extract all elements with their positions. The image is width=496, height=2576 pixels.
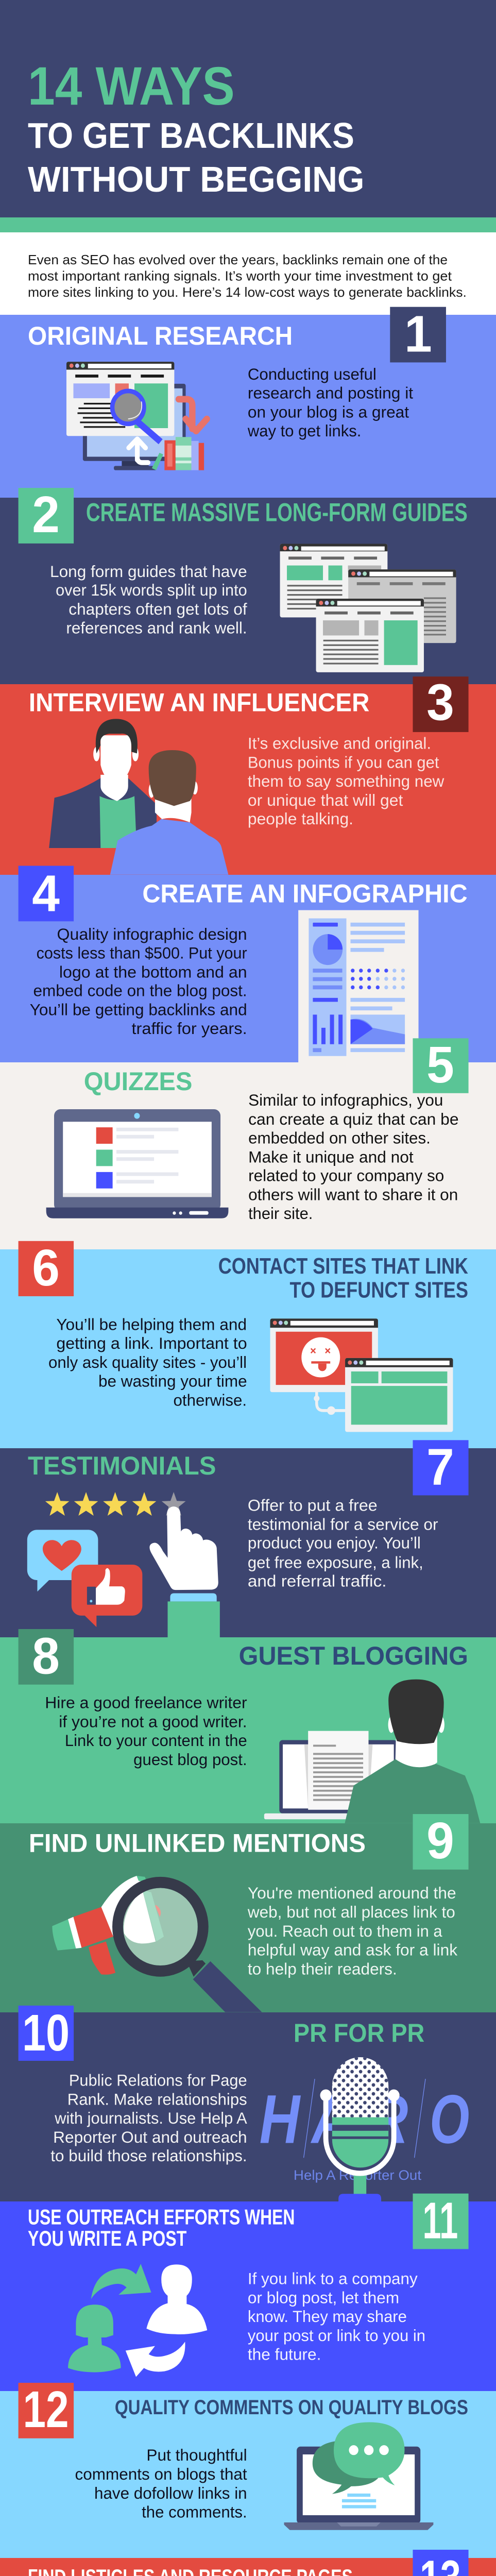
panel: 9 find unlinked mentions — [0, 1811, 496, 2012]
body text: Conducting useful — [248, 366, 377, 383]
heading — [28, 2205, 295, 2250]
number badge 12: 12 — [23, 2380, 69, 2438]
icon: dead site and replacement site — [270, 1318, 453, 1432]
heading: GUEST BLOGGING — [239, 1641, 468, 1670]
logo: HARO wordmark: R — [370, 2080, 408, 2158]
body text: product you enjoy. You’ll — [248, 1534, 421, 1552]
body text: Put thoughtful — [146, 2447, 247, 2464]
panel: title header — [0, 0, 496, 232]
body text: only ask quality sites - you’ll — [48, 1353, 247, 1371]
body text: You're mentioned around the — [248, 1884, 456, 1902]
title: WITHOUT BEGGING — [28, 160, 365, 199]
panel: 1 original research — [0, 305, 496, 498]
number badge 10: 10 — [22, 2004, 70, 2062]
body text: Link to your content in the — [65, 1732, 247, 1750]
body text: Public Relations for Page — [69, 2072, 247, 2090]
number badge 8: 8 — [32, 1627, 60, 1685]
body text — [75, 2447, 247, 2521]
number badge 11: 11 — [423, 2192, 458, 2249]
body text: testimonial for a service or — [248, 1516, 438, 1534]
icon: microphone — [320, 2057, 400, 2201]
body text: can create a quiz that can be — [248, 1111, 459, 1128]
intro text: most important ranking signals. It’s worth your time investment to get — [28, 269, 452, 284]
body text: way to get links. — [247, 422, 361, 440]
body text: them to say something new — [248, 772, 444, 790]
body text: to build those relationships. — [50, 2147, 247, 2165]
icon: two people exchanging arrows — [68, 2264, 207, 2377]
icon: writer at laptop with document — [264, 1680, 480, 1823]
heading: TO DEFUNCT SITES — [290, 1278, 468, 1303]
icon: two people talking — [49, 719, 228, 875]
body text: be wasting your time — [98, 1372, 247, 1390]
body text: embedded on other sites. — [248, 1129, 431, 1147]
heading: TESTIMONIALS — [28, 1451, 216, 1480]
icon: heart speech bubble — [27, 1530, 98, 1591]
heading: USE OUTREACH EFFORTS WHEN — [28, 2205, 295, 2229]
body text — [30, 925, 247, 1038]
heading: FIND UNLINKED MENTIONS — [29, 1829, 366, 1858]
body text: or blog post, let them — [248, 2289, 399, 2307]
body text: the comments. — [142, 2503, 247, 2521]
body text: related to your company so — [248, 1167, 444, 1185]
body text: have dofollow links in — [94, 2485, 247, 2502]
body text: and referral traffic. — [248, 1572, 387, 1590]
icon: research browser, monitor, magnifier and books — [66, 362, 207, 470]
body text — [247, 366, 414, 440]
body text: their site. — [248, 1205, 313, 1223]
body text: otherwise. — [174, 1392, 247, 1409]
body text: helpful way and ask for a link — [248, 1941, 458, 1959]
body text: Reporter Out and outreach — [53, 2128, 247, 2146]
panel: 5 quizzes — [0, 1036, 496, 1249]
intro text: more sites linking to you. Here’s 14 low-cost ways to generate backlinks. — [28, 285, 467, 300]
number badge 9: 9 — [426, 1811, 454, 1870]
body text: You’ll be getting backlinks and — [30, 1001, 247, 1019]
body text: If you link to a company — [248, 2270, 418, 2288]
panel: introduction — [0, 232, 496, 315]
body text: if you’re not a good writer. — [59, 1713, 247, 1731]
icon: thumbs-up speech bubble — [72, 1565, 142, 1627]
body text: or unique that will get — [248, 791, 403, 809]
number badge 4 — [19, 865, 74, 922]
title: TO GET BACKLINKS — [28, 116, 354, 156]
logo: HARO wordmark — [260, 2079, 469, 2183]
number badge 5: 5 — [426, 1036, 454, 1093]
body text: to help their readers. — [248, 1960, 397, 1978]
body text: comments on blogs that — [75, 2466, 247, 2483]
panel: 4 create an infographic — [0, 865, 496, 1063]
heading: INTERVIEW AN INFLUENCER — [29, 688, 369, 717]
number badge 5 — [413, 1036, 469, 1093]
panel: 12 quality comments — [0, 2380, 496, 2558]
number badge 3 — [413, 673, 469, 732]
body text: know. They may share — [248, 2308, 407, 2326]
body text — [248, 735, 444, 828]
number badge 1 — [390, 305, 446, 363]
heading: YOU WRITE A POST — [28, 2226, 186, 2250]
body text: Bonus points if you can get — [248, 754, 439, 772]
body text: you. Reach out to them in a — [248, 1922, 443, 1940]
icon: infographic page — [298, 910, 419, 1063]
panel: 10 PR for PR — [0, 2004, 496, 2201]
number badge 2: 2 — [32, 486, 60, 544]
body text: Rank. Make relationships — [67, 2091, 247, 2109]
body text: on your blog is a great — [248, 403, 409, 421]
body text: guest blog post. — [133, 1751, 247, 1769]
logo: HARO wordmark: H — [260, 2080, 301, 2158]
heading: CREATE AN INFOGRAPHIC — [142, 879, 468, 908]
body text: the future. — [248, 2346, 321, 2363]
icon: megaphone under magnifying glass — [52, 1876, 262, 2012]
icon: star rating — [45, 1492, 186, 1516]
icon: quiz on laptop — [46, 1109, 228, 1218]
logo: HARO wordmark: Help A Reporter Out — [294, 2167, 422, 2183]
heading: QUIZZES — [84, 1067, 192, 1096]
panel: 2 long-form guides — [0, 486, 496, 684]
icon: comment bubbles on laptop — [284, 2422, 433, 2530]
body text: Hire a good freelance writer — [45, 1694, 247, 1712]
body text — [248, 1092, 459, 1223]
panel: 7 testimonials — [0, 1438, 496, 1637]
body text: people talking. — [248, 810, 353, 828]
body text: with journalists. Use Help A — [54, 2109, 247, 2127]
body text: You’ll be helping them and — [56, 1316, 247, 1334]
number badge 6 — [19, 1239, 74, 1296]
number badge 1: 1 — [404, 305, 432, 363]
body text: It’s exclusive and original. — [248, 735, 431, 753]
body text: Offer to put a free — [248, 1497, 378, 1515]
title — [28, 56, 365, 199]
body text: Long form guides that have — [50, 563, 247, 581]
number badge 7: 7 — [426, 1438, 454, 1496]
logo: HARO wordmark: A — [311, 2080, 350, 2158]
body text: over 15k words split up into — [56, 582, 247, 599]
body text: web, but not all places link to — [247, 1903, 455, 1921]
logo: HARO wordmark: O — [430, 2080, 469, 2158]
panel: 13 listicles and resource pages — [0, 2550, 496, 2576]
panel: 6 contact sites that link to defunct sites — [0, 1239, 496, 1448]
body text: embed code on the blog post. — [33, 982, 247, 1000]
intro text: Even as SEO has evolved over the years, backlinks remain one of the — [28, 252, 448, 267]
number badge 7 — [413, 1438, 469, 1496]
body text: get free exposure, a link, — [248, 1554, 423, 1572]
title: 14 WAYS — [28, 56, 235, 116]
icon: stacked browser windows — [280, 544, 456, 672]
body text: chapters often get lots of — [69, 601, 247, 618]
body text — [248, 1497, 438, 1590]
body text — [50, 563, 247, 637]
number badge 8 — [19, 1627, 74, 1685]
heading — [218, 1253, 468, 1303]
body text: costs less than $500. Put your — [37, 944, 247, 962]
body text: references and rank well. — [66, 619, 247, 637]
icon: pointing hand tapping star — [149, 1506, 220, 1637]
number badge 2 — [19, 486, 74, 544]
body text: Quality infographic design — [57, 925, 247, 943]
panel: 3 interview an influencer — [0, 673, 496, 875]
panel: 11 outreach efforts — [0, 2192, 496, 2391]
body text: getting a link. Important to — [56, 1334, 247, 1352]
body text — [50, 2072, 247, 2165]
number badge 9 — [413, 1811, 469, 1870]
intro text — [28, 252, 467, 300]
body text: research and posting it — [248, 384, 414, 402]
body text: your post or link to you in — [248, 2327, 425, 2345]
body text — [248, 2270, 425, 2363]
body text: others will want to share it on — [248, 1186, 458, 1204]
body text: Similar to infographics, you — [248, 1092, 443, 1109]
body text: logo at the bottom and an — [59, 963, 247, 981]
body text — [48, 1316, 247, 1409]
number badge 6: 6 — [32, 1239, 60, 1296]
panel: 8 guest blogging — [0, 1627, 496, 1823]
body text: Make it unique and not — [248, 1148, 414, 1166]
number badge 3: 3 — [426, 673, 454, 731]
body text — [45, 1694, 247, 1769]
number badge 4: 4 — [32, 865, 60, 922]
heading: ORIGINAL RESEARCH — [28, 321, 293, 350]
heading: PR FOR PR — [294, 2019, 424, 2047]
body text — [247, 1884, 458, 1978]
body text: traffic for years. — [131, 1020, 247, 1038]
